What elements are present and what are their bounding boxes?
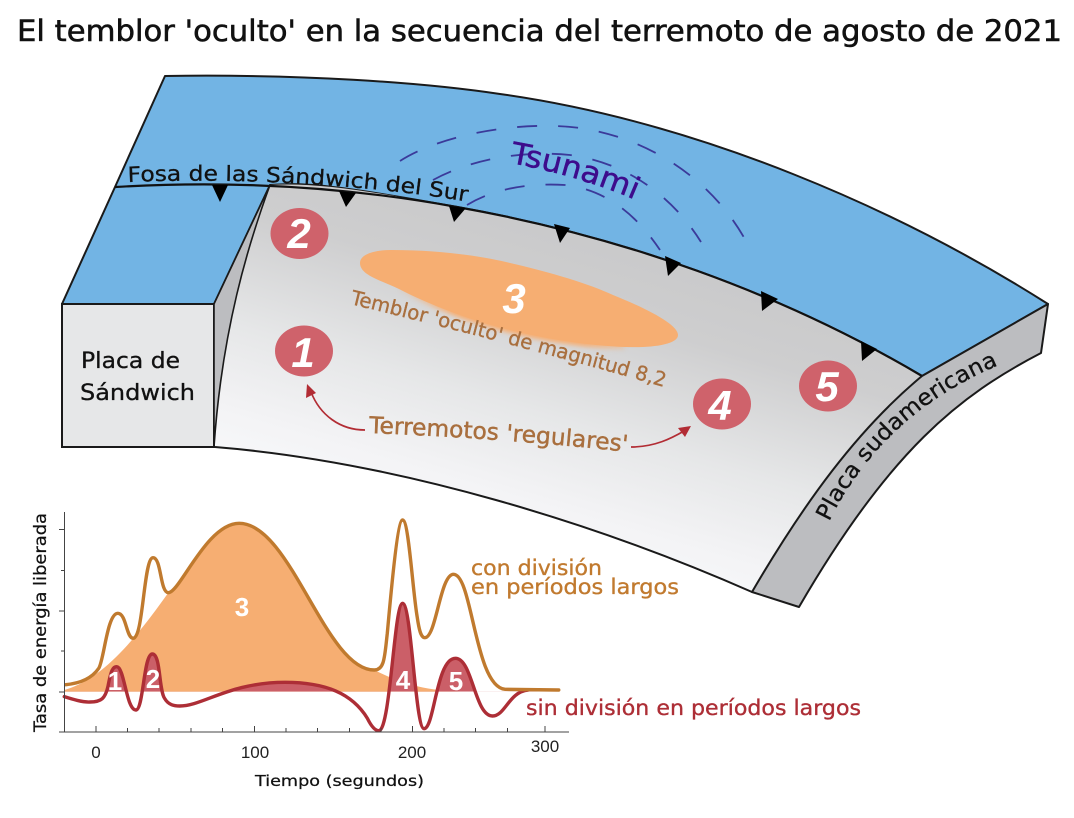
axes: [59, 512, 569, 732]
panel: 3D subduction diagram: [61, 74, 1049, 608]
marker 3: 3: [502, 275, 526, 322]
legend: with long-period split: [471, 556, 679, 599]
Sandwich plate side face: [214, 185, 270, 447]
marker 2: [270, 208, 328, 259]
label: regular earthquakes: Terremotos 'regulares': [369, 416, 627, 452]
marker 1: [275, 326, 333, 376]
marker 5: 5: [815, 363, 839, 410]
y axis title: Tasa de energía liberada: [31, 513, 51, 733]
trench line: [115, 184, 922, 376]
marker 5: [799, 360, 857, 412]
x tick labels: 300: [531, 737, 559, 756]
orange curve: [66, 520, 559, 690]
trench teeth: [212, 185, 877, 361]
Sandwich plate front face: [62, 304, 214, 447]
red curve: [64, 603, 528, 731]
marker 4: 4: [707, 382, 732, 429]
marker 1: 1: [291, 329, 315, 376]
label: trench: Fosa de las Sándwich del Sur: [129, 164, 469, 201]
label: Sandwich plate: Sándwich: [80, 381, 195, 406]
label: Sandwich plate: Placa de: [81, 349, 180, 374]
arrow to 1: [306, 384, 365, 430]
label: South American plate: Placa sudamericana: [815, 356, 997, 520]
chart number 1: 1: [108, 666, 122, 696]
tsunami wave fronts: [400, 126, 748, 250]
chart: energy release rate over time: [31, 512, 861, 790]
red area: regular earthquakes: [65, 605, 546, 692]
x tick labels: [91, 737, 559, 762]
orange area: event 3: [64, 523, 459, 692]
marker 2: 2: [286, 210, 311, 257]
chart curves and fills: [64, 520, 559, 731]
plate interface surface: [215, 185, 922, 592]
x tick labels: 0: [91, 743, 101, 762]
label: tsunami: Tsunami: [513, 141, 641, 199]
arrow to 4: [631, 426, 691, 447]
legend: with long-period split: en períodos largos: [471, 575, 679, 599]
legend: without long-period split: sin división en períodos largos: [526, 696, 861, 720]
chart number 2: 2: [146, 664, 160, 694]
hidden earthquake rupture zone: [360, 250, 678, 349]
chart number 5: 5: [449, 666, 463, 696]
x tick labels: 100: [241, 743, 269, 762]
x tick labels: 200: [398, 743, 426, 762]
marker 4: [693, 378, 751, 430]
title: El temblor 'oculto' en la secuencia del terremoto de agosto de 2021: [17, 14, 1062, 48]
x axis title: Tiempo (segundos): [254, 772, 424, 790]
plate bottom edge: [215, 447, 752, 592]
chart number 3: 3: [235, 592, 249, 622]
label: Sandwich plate: [80, 349, 195, 406]
ocean surface: [62, 76, 1048, 376]
legend: with long-period split: con división: [471, 556, 602, 580]
label: hidden tremor: Temblor 'oculto' de magnitud 8,2: [352, 290, 666, 387]
South American plate side face: [752, 304, 1048, 607]
chart number 4: 4: [396, 665, 411, 695]
